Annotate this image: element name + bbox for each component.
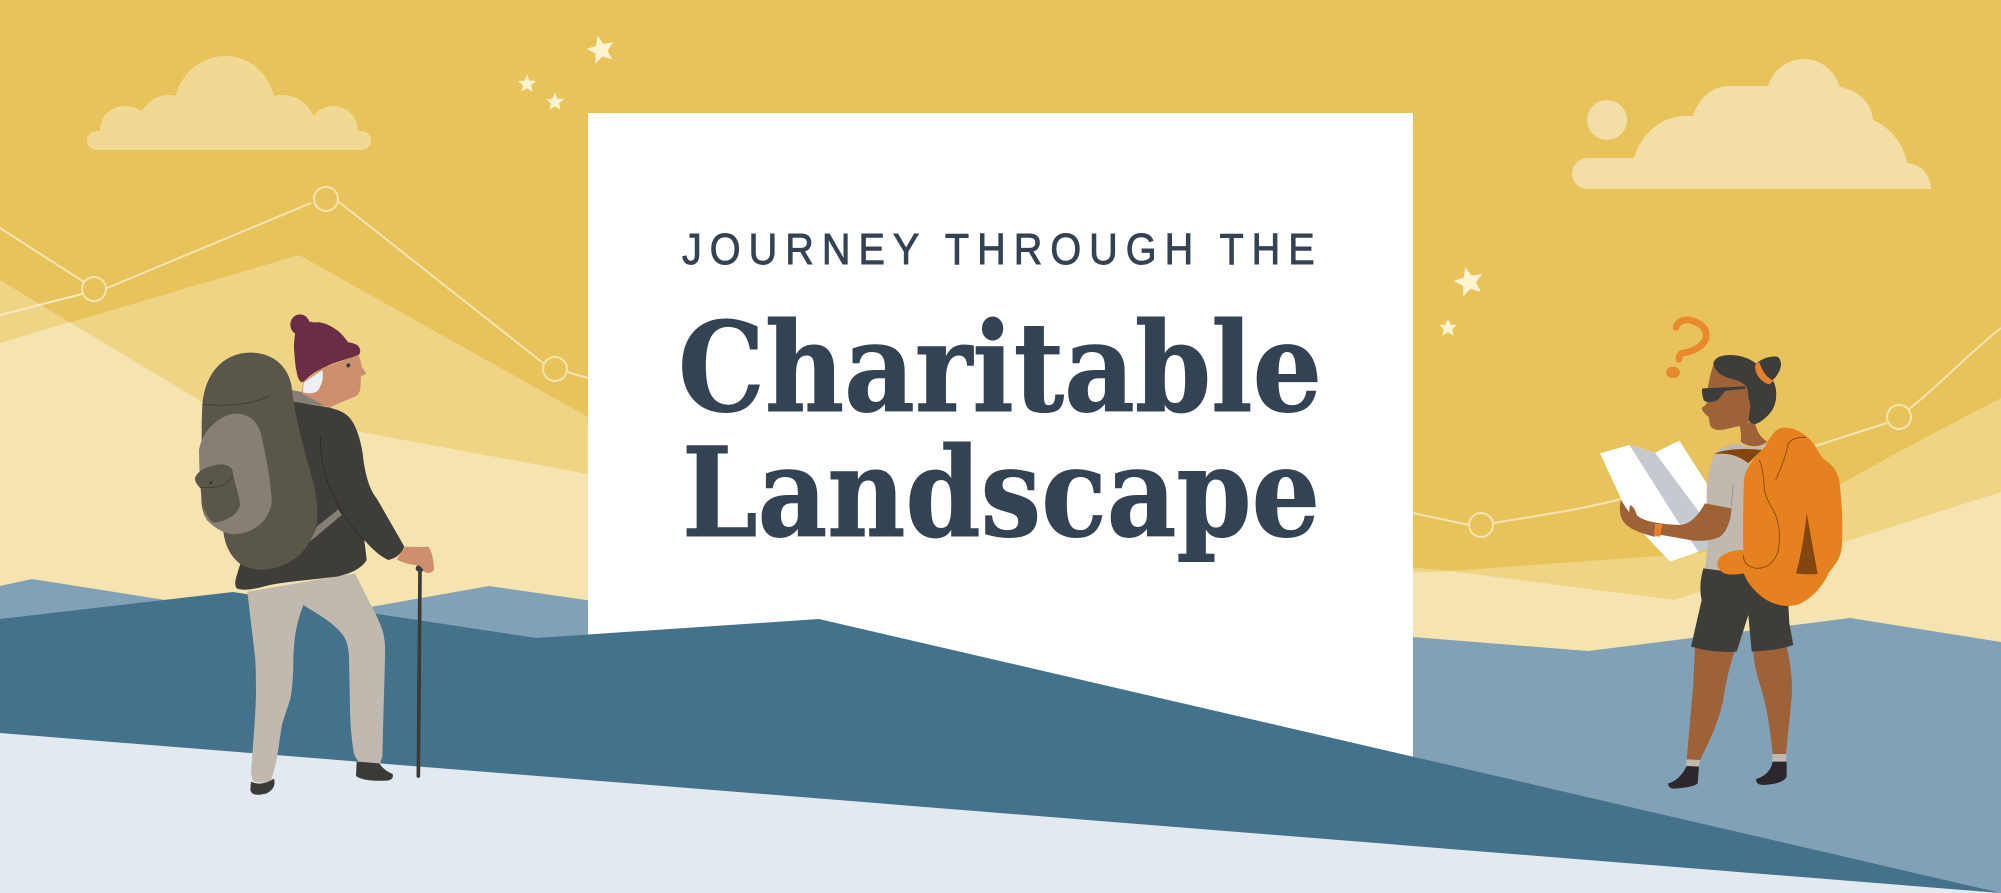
- hand: [397, 547, 434, 573]
- light blue hills left: [0, 579, 600, 660]
- mid mountains right: [1400, 492, 2001, 680]
- white title panel: [588, 113, 1413, 773]
- title text block: [678, 224, 1322, 566]
- orange backpack: [1717, 428, 1842, 606]
- right cloud: [1572, 59, 1931, 189]
- sunglasses: [1702, 386, 1746, 402]
- hat pom: [290, 314, 310, 335]
- socks: [1686, 754, 1786, 767]
- wristband: [1654, 524, 1663, 537]
- far mountains left: [0, 255, 700, 640]
- left cloud: [87, 56, 371, 150]
- strap: [1714, 449, 1762, 463]
- face: [1702, 365, 1752, 430]
- snowy foreground: [0, 733, 2001, 893]
- eye: [346, 363, 350, 367]
- backpack shadow: [1796, 513, 1818, 574]
- hiker with walking stick: [195, 314, 434, 795]
- light blue hills right: [1400, 618, 2001, 893]
- shorts: [1691, 568, 1793, 652]
- head: [1702, 355, 1781, 446]
- title line one: Charitable: [678, 296, 1322, 441]
- title line two: Landscape: [682, 421, 1320, 566]
- pocket flap details: [200, 396, 269, 488]
- far mountain shoulder left: [0, 280, 69, 343]
- hiker with map and question mark: [1600, 320, 1842, 789]
- stars left: [518, 33, 617, 110]
- backpack stitching: [1743, 437, 1806, 568]
- head: [290, 314, 366, 408]
- line chart right: [1413, 328, 2001, 537]
- hair: [1713, 355, 1776, 424]
- shirt: [1705, 442, 1768, 573]
- trousers: [247, 573, 385, 783]
- neck: [1739, 422, 1767, 446]
- map: [1600, 441, 1710, 562]
- hair bun: [1755, 357, 1781, 382]
- dark blue foreground hill: [0, 592, 2001, 893]
- subtitle: JOURNEY THROUGH THE: [682, 224, 1315, 273]
- white hair: [303, 370, 323, 393]
- backpack pocket: [199, 414, 272, 534]
- small pocket: [195, 464, 240, 523]
- arm: [1620, 500, 1732, 541]
- shoes: [1668, 762, 1787, 789]
- boots: [250, 762, 393, 795]
- legs: [1687, 647, 1792, 760]
- walking pole: [416, 565, 424, 776]
- jacket: [235, 402, 404, 590]
- backpack: [201, 353, 317, 570]
- mid mountains left: [0, 322, 700, 640]
- far mountains right: [1400, 398, 2001, 660]
- face and neck: [302, 355, 366, 408]
- hat: [294, 321, 360, 382]
- sleeve crease: [1731, 485, 1733, 507]
- question mark: [1666, 320, 1706, 378]
- waist strap: [310, 509, 342, 542]
- hair band: [1755, 362, 1774, 384]
- collar: [292, 390, 330, 407]
- stars right: [1439, 263, 1486, 336]
- jacket seam: [321, 436, 363, 540]
- line chart left: [0, 187, 588, 381]
